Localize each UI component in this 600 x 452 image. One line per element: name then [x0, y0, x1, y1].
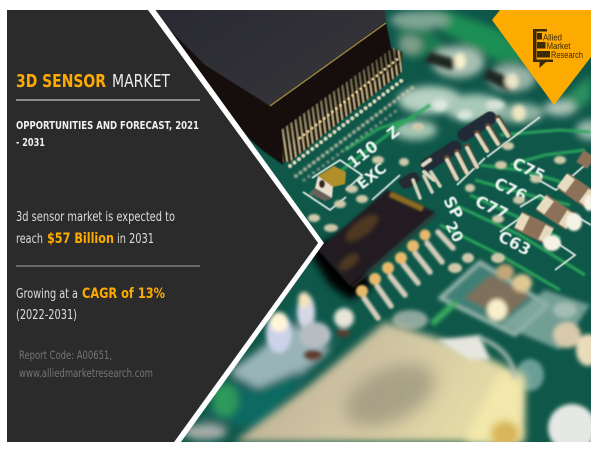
text block: report code: www.alliedmarketresearch.com [19, 366, 153, 380]
silkscreen labels: Z [383, 122, 403, 143]
solder row 3 [296, 88, 412, 176]
lower chip gold-tipped pins [356, 230, 453, 318]
title [16, 72, 170, 92]
text block: market size [16, 210, 175, 247]
title: MARKET [112, 72, 170, 92]
logo wordmark [543, 32, 583, 61]
silkscreen labels [344, 122, 548, 260]
chip pin shading [281, 48, 400, 146]
chip top face [150, 10, 386, 106]
solder row 2 [290, 78, 405, 166]
capacitor highlights [543, 195, 594, 251]
panel: dark left panel with chevron edge [7, 10, 324, 442]
text block: CAGR [16, 286, 165, 323]
silkscreen labels: 20 [441, 218, 467, 245]
silkscreen labels: C76 [491, 174, 530, 206]
silkscreen outlines [303, 117, 591, 270]
solder row 4 [304, 108, 400, 180]
text block: CAGR: (2022-2031) [16, 308, 77, 323]
logo wordmark: Research [551, 50, 583, 61]
lower black chip [308, 172, 453, 318]
logo wordmark: Market [546, 41, 571, 52]
logo badge [492, 10, 591, 105]
large cream crystal component [235, 322, 525, 447]
silkscreen labels: C77 [472, 192, 511, 224]
small chip A [423, 146, 477, 180]
silkscreen labels: C75 [509, 154, 548, 186]
title: 3D SENSOR [16, 72, 106, 92]
lower right blurred components [392, 262, 600, 391]
chip side face [150, 10, 392, 165]
photo: circuit board [150, 10, 600, 452]
silkscreen labels: C63 [495, 227, 534, 260]
text block: market size: 3d sensor market is expected to [16, 210, 175, 225]
subtitle: OPPORTUNITIES AND FORECAST, 2021 [16, 119, 199, 132]
chip gold edge [270, 23, 386, 106]
solder pads [308, 123, 566, 273]
lower left blurred components [183, 300, 340, 440]
text block: CAGR: Growing at a [16, 287, 78, 302]
silkscreen labels: EXC [353, 159, 390, 193]
logo wordmark: Allied [543, 32, 562, 44]
chip pins [281, 48, 402, 162]
big black chip [150, 10, 412, 180]
small chip B [464, 118, 508, 151]
lower chip upper pins [413, 172, 440, 198]
dark panel [7, 10, 318, 442]
text block: market size: $57 Billion [47, 231, 114, 247]
chip shadow [308, 232, 372, 300]
text block: CAGR: CAGR of 13% [82, 286, 165, 302]
silkscreen labels: SP [439, 193, 467, 223]
solder row 1 [300, 57, 400, 138]
subtitle [16, 119, 199, 149]
blurred upper board details [390, 10, 600, 140]
chip label [401, 175, 418, 186]
blurred white component bottom right [544, 400, 591, 442]
text block: market size: reach [16, 232, 43, 247]
text block: report code [19, 348, 153, 380]
ceramic capacitors [518, 156, 592, 236]
gold capacitor [310, 166, 346, 201]
text block: market size: in 2031 [117, 232, 154, 247]
green traces mid board [310, 105, 590, 290]
white chevron border [148, 10, 324, 442]
icon: logo mark [533, 29, 553, 68]
subtitle: - 2031 [16, 136, 45, 149]
silkscreen labels: 110 [344, 137, 382, 172]
board base [150, 10, 591, 442]
text block: report code: Report Code: A00651, [19, 348, 112, 362]
